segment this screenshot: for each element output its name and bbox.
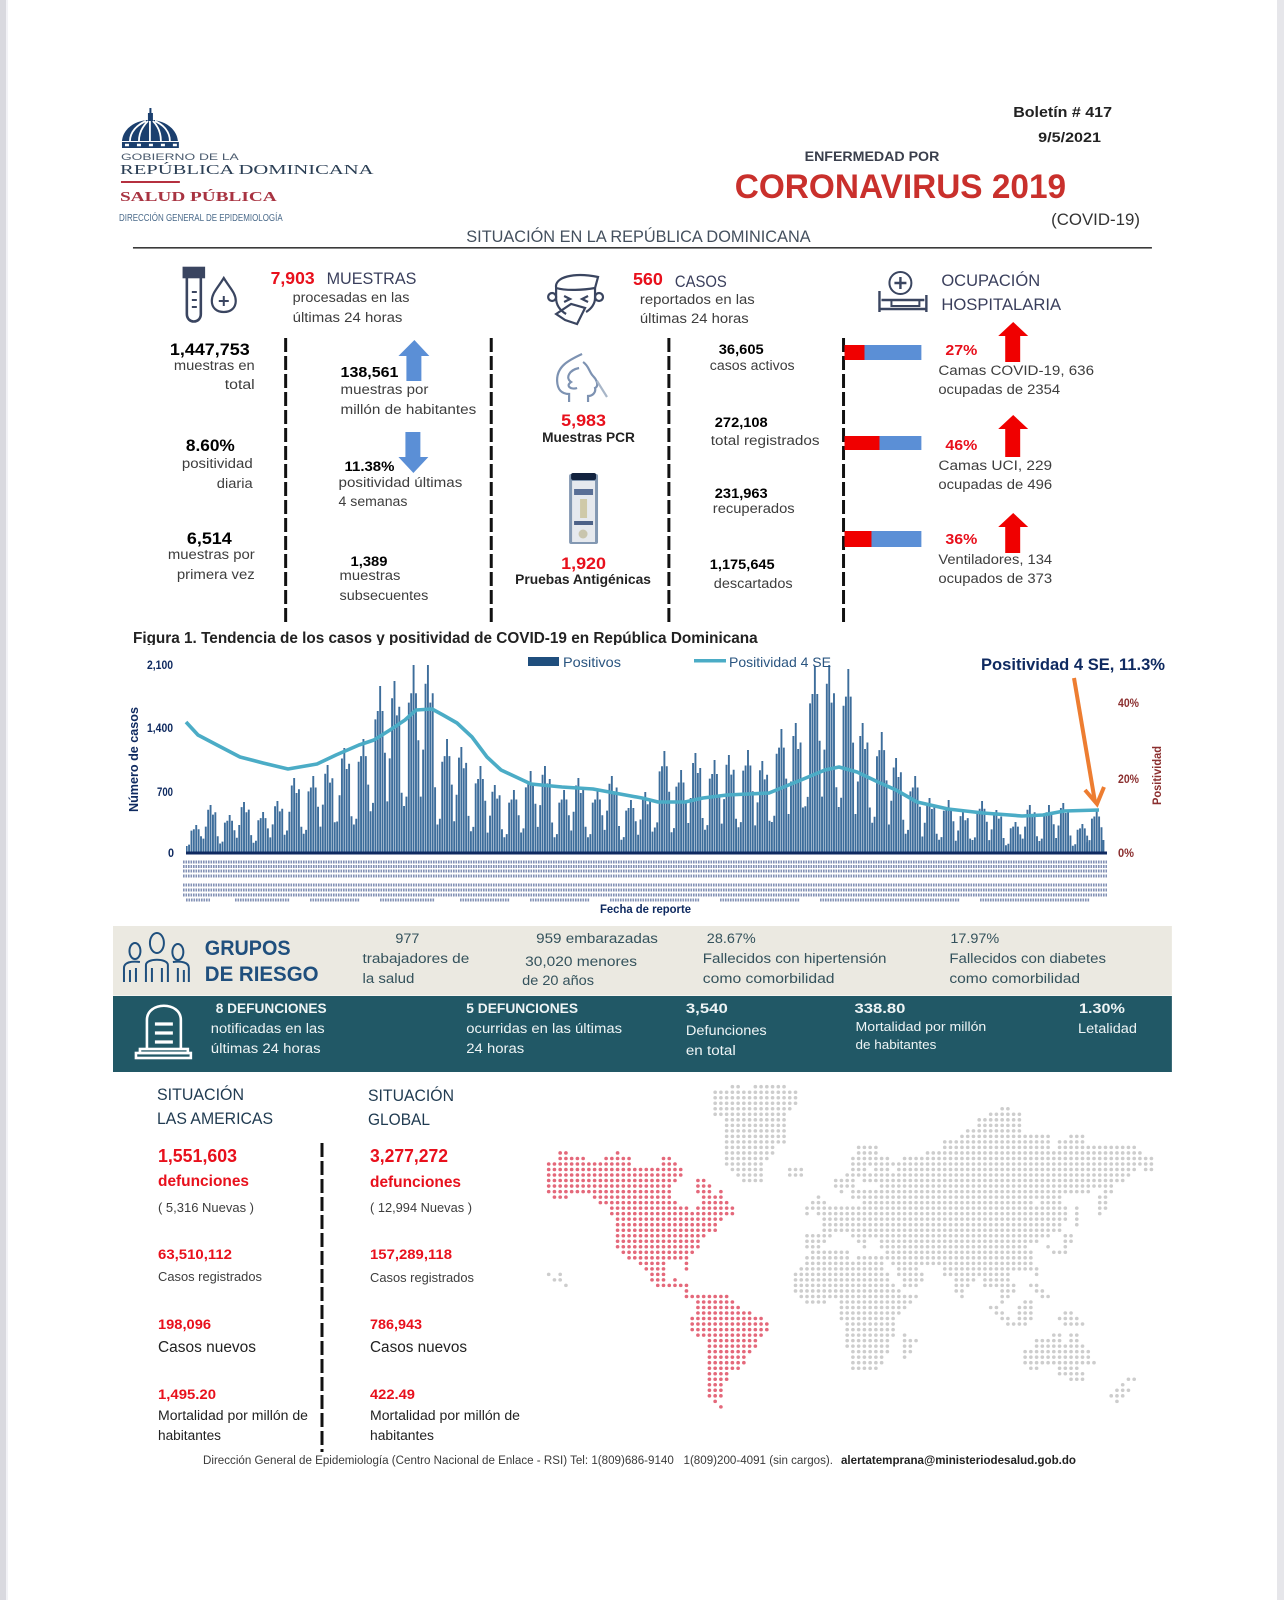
column: ocupación hospitalaria: 27% (945, 342, 977, 359)
panel: grupos de riesgo: DE RIESGO (205, 963, 319, 986)
column: ocupación hospitalaria: 36% (945, 531, 977, 548)
panel: defunciones: últimas 24 horas (211, 1040, 321, 1056)
positivity line (186, 709, 1099, 816)
chart: left axis: 1,400 (147, 721, 173, 735)
panel: situación global: 3,277,272 (370, 1146, 448, 1166)
column: ocupación hospitalaria (845, 322, 1094, 586)
x axis line (186, 852, 1107, 854)
column: muestras totals (168, 340, 255, 582)
panel: ocupación hospitalaria heading: HOSPITALARIA (941, 295, 1062, 314)
panel: ocupación hospitalaria heading: OCUPACIÓN (941, 271, 1040, 290)
column: casos: descartados (714, 575, 793, 591)
chart: right axis: 20% (1118, 774, 1139, 786)
panel: situación las Américas: 1,551,603 (158, 1146, 237, 1166)
text: Dirección General de Epidemiología: DIRECCIÓN GENERAL DE EPIDEMIOLOGÍA (119, 211, 283, 224)
icon: tombstone (136, 1006, 191, 1058)
column: muestras totals: primera vez (177, 566, 255, 582)
panel: situación las Américas: Casos nuevos (158, 1339, 256, 1356)
panel: situación global: defunciones (370, 1174, 461, 1191)
panel: casos (548, 269, 755, 326)
panel: situación las Américas: defunciones (158, 1173, 249, 1190)
column: muestras totals: 1,447,753 (170, 340, 250, 359)
panel: grupos de riesgo: 17.97% (950, 930, 999, 946)
column: PCR y antigénicas: Pruebas Antigénicas (515, 571, 651, 587)
chart: left axis (127, 658, 174, 860)
panel: situación global: 157,289,118 (370, 1246, 452, 1262)
chart legend: Positividad 4 SE (729, 654, 831, 670)
title: (COVID-19) (1051, 210, 1140, 229)
panel: ocupación hospitalaria heading (879, 271, 1062, 314)
logo: Gobierno de la República Dominicana, Salud Pública (119, 108, 374, 224)
panel: situación las Américas: ( 5,316 Nuevas ) (158, 1200, 254, 1215)
panel: grupos de riesgo: 30,020 menores (525, 953, 637, 969)
panel: defunciones: notificadas en las (211, 1020, 325, 1036)
bulletin number and date (1013, 104, 1112, 145)
column: ocupación hospitalaria: 46% (945, 437, 977, 454)
figure heading: Figura 1. Tendencia de los casos y positividad de COVID-19 en República Dominicana (133, 630, 758, 647)
column: muestras por millón: 138,561 (341, 364, 398, 381)
chart: left axis: 0 (168, 846, 174, 860)
bar: camas covid 27% (845, 345, 921, 360)
chart: right axis: Positividad (1152, 746, 1164, 805)
column: muestras por millón: 4 semanas (339, 493, 407, 509)
panel: situación global: habitantes (370, 1428, 434, 1443)
panel: defunciones: 3,540 (686, 1000, 728, 1016)
panel: muestras: últimas 24 horas (293, 309, 402, 325)
panel: situación las Américas: Mortalidad por millón de (158, 1408, 308, 1423)
panel: situación global: ( 12,994 Nuevas ) (370, 1200, 472, 1215)
column: ocupación hospitalaria: Ventiladores, 134 (938, 551, 1052, 567)
column: ocupación hospitalaria: ocupados de 373 (938, 570, 1052, 586)
column: muestras totals: 6,514 (187, 529, 232, 548)
panel: situación global: GLOBAL (368, 1110, 430, 1129)
panel: defunciones: ocurridas en las últimas (466, 1020, 622, 1036)
panel: grupos de riesgo: 959 embarazadas (536, 930, 658, 946)
column: casos (710, 341, 820, 591)
chart: right axis (1118, 698, 1164, 860)
panel: situación global: Casos registrados (370, 1270, 474, 1285)
column: PCR y antigénicas (515, 354, 651, 587)
panel: grupos de riesgo: como comorbilidad (703, 970, 835, 986)
column: PCR y antigénicas: 1,920 (561, 554, 606, 573)
panel: situación las Américas: LAS AMERICAS (157, 1109, 273, 1128)
column: casos: 1,175,645 (710, 556, 775, 572)
panel: grupos de riesgo (113, 926, 1172, 996)
title: ENFERMEDAD POR (805, 148, 939, 164)
subtitle: SITUACIÓN EN LA REPÚBLICA DOMINICANA (466, 227, 811, 246)
column: muestras por millón: subsecuentes (340, 587, 428, 603)
column: muestras por millón: 11.38% (345, 458, 395, 474)
arrow: red up 3 (998, 513, 1028, 553)
column: muestras totals: total (225, 376, 255, 392)
panel: grupos de riesgo: de 20 años (522, 972, 594, 988)
icon: people (124, 933, 189, 982)
panel: grupos de riesgo: la salud (363, 970, 414, 986)
panel: casos: CASOS (675, 272, 727, 291)
column: muestras totals: muestras en (174, 357, 255, 373)
text: República Dominicana: REPÚBLICA DOMINICANA (120, 162, 374, 177)
text: Salud Pública: SALUD PÚBLICA (120, 188, 277, 205)
panel: muestras: MUESTRAS (327, 269, 416, 288)
footer contact line: alertatemprana@ministeriodesalud.gob.do (841, 1455, 1076, 1467)
panel: defunciones: 5 DEFUNCIONES (466, 1000, 578, 1016)
icon: nasal swab (557, 354, 607, 402)
column: casos: 272,108 (715, 414, 768, 430)
panel: defunciones (113, 996, 1172, 1072)
panel: casos: 560 (633, 269, 663, 289)
panel: defunciones: 1.30% (1079, 1000, 1126, 1016)
panel: defunciones: 338.80 (855, 1000, 906, 1016)
column: casos: casos activos (710, 357, 795, 373)
column: muestras por millón: 1,389 (351, 553, 388, 569)
column: casos: 231,963 (715, 485, 768, 501)
column: PCR y antigénicas: Muestras PCR (542, 429, 635, 445)
date tick labels band (183, 862, 1107, 900)
chart: left axis: 2,100 (147, 658, 173, 672)
panel: grupos de riesgo: 977 (395, 930, 420, 946)
panel: situación las Américas: habitantes (158, 1428, 221, 1443)
footer contact line: Dirección General de Epidemiología (Centro Nacional de Enlace - RSI) Tel: 1(809)686-9140 1(809)200-4091 (sin cargos). (203, 1455, 833, 1467)
panel: situación las Américas: 198,096 (158, 1316, 211, 1332)
panel: grupos de riesgo: como comorbilidad (949, 970, 1080, 986)
column: muestras por millón: positividad últimas (339, 474, 462, 490)
arrow: red up 2 (998, 415, 1028, 457)
column: ocupación hospitalaria: Camas COVID-19, 636 (938, 362, 1094, 378)
text: Gobierno de la: GOBIERNO DE LA (121, 152, 239, 162)
title (735, 148, 1140, 229)
chart legend: Positivos (563, 654, 621, 670)
column: ocupación hospitalaria: Camas UCI, 229 (938, 457, 1052, 473)
panel: casos: reportados en las (640, 291, 755, 307)
panel: situación global: Mortalidad por millón de (370, 1408, 520, 1423)
column: muestras por millón: muestras (340, 567, 400, 583)
bulletin number and date: Boletín # 417 (1013, 104, 1112, 121)
panel: situación global: 422.49 (370, 1386, 415, 1402)
arrow: red up 1 (998, 322, 1028, 362)
title: CORONAVIRUS 2019 (735, 168, 1066, 206)
bar: camas UCI 46% (845, 436, 921, 450)
icon: face with mask (548, 275, 603, 324)
panel: situación las Américas: 1,495.20 (158, 1386, 216, 1402)
panel: situación las Américas: Casos registrados (158, 1269, 262, 1284)
column: ocupación hospitalaria: ocupadas de 496 (938, 476, 1052, 492)
panel: situación global (368, 1086, 520, 1443)
arrow: blue up (398, 340, 429, 381)
arrow: orange (1074, 678, 1104, 804)
chart: left axis: 700 (157, 785, 173, 799)
column: muestras por millón: muestras por (341, 381, 429, 397)
column: muestras totals: diaria (217, 475, 253, 491)
chart: right axis: 40% (1118, 698, 1139, 710)
column: muestras por millón (339, 340, 476, 603)
panel: casos: últimas 24 horas (640, 310, 749, 326)
dot world map (549, 1087, 1152, 1407)
column: casos: 36,605 (719, 341, 764, 357)
icon: dome (122, 108, 179, 148)
panel: situación las Américas: SITUACIÓN (157, 1085, 244, 1104)
panel: situación las Américas: 63,510,112 (158, 1246, 232, 1262)
column: muestras totals: 8.60% (186, 436, 235, 455)
chart: x axis title: Fecha de reporte (600, 902, 691, 916)
callout: positividad 4 SE 11.3%: Positividad 4 SE, 11.3% (981, 655, 1165, 674)
chart: right axis: 0% (1118, 848, 1134, 860)
icon: antigen test kit (569, 473, 598, 544)
icon: hospital bed (879, 272, 926, 312)
panel: situación global: SITUACIÓN (368, 1086, 454, 1105)
panel: grupos de riesgo: GRUPOS (205, 937, 291, 960)
column: PCR y antigénicas: 5,983 (561, 411, 606, 430)
panel: defunciones: de habitantes (856, 1037, 937, 1052)
bulletin number and date: 9/5/2021 (1038, 129, 1101, 145)
panel: defunciones: Defunciones (686, 1022, 767, 1038)
arrow: blue down (398, 432, 428, 473)
dashed column dividers (286, 338, 844, 622)
panel: grupos de riesgo: 28.67% (707, 930, 756, 946)
panel: situación global: Casos nuevos (370, 1339, 467, 1356)
chart: positivos bars and positivity line (183, 665, 1107, 900)
panel: muestras: 7,903 (271, 268, 315, 288)
bar: ventiladores 36% (845, 531, 921, 547)
panel: defunciones: 24 horas (466, 1040, 524, 1056)
panel: defunciones: Mortalidad por millón (856, 1019, 986, 1034)
bars (186, 665, 1104, 853)
chart: left axis: Número de casos (127, 707, 141, 812)
icon: test tube and drop (184, 268, 236, 322)
column: casos: recuperados (713, 500, 795, 516)
panel: defunciones: en total (686, 1042, 736, 1058)
column: casos: total registrados (711, 432, 820, 448)
map: rest of world in grey (549, 1087, 1152, 1401)
column: muestras totals: positividad (182, 455, 253, 471)
column: muestras totals: muestras por (168, 546, 255, 562)
panel: grupos de riesgo: Fallecidos con diabetes (949, 950, 1106, 966)
map: Americas in red (549, 1153, 767, 1407)
panel: muestras: procesadas en las (293, 289, 409, 305)
panel: muestras (184, 268, 416, 325)
column: ocupación hospitalaria: ocupadas de 2354 (938, 381, 1060, 397)
callout: positividad 4 SE 11.3% (981, 655, 1165, 804)
chart legend (528, 654, 831, 670)
panel: situación las Américas (157, 1085, 308, 1443)
panel: grupos de riesgo: Fallecidos con hipertensión (703, 950, 886, 966)
panel: defunciones: 8 DEFUNCIONES (216, 1000, 327, 1016)
panel: defunciones: Letalidad (1078, 1020, 1137, 1036)
column: muestras por millón: millón de habitantes (341, 401, 476, 417)
panel: situación global: 786,943 (370, 1316, 422, 1332)
panel: grupos de riesgo: trabajadores de (363, 950, 470, 966)
